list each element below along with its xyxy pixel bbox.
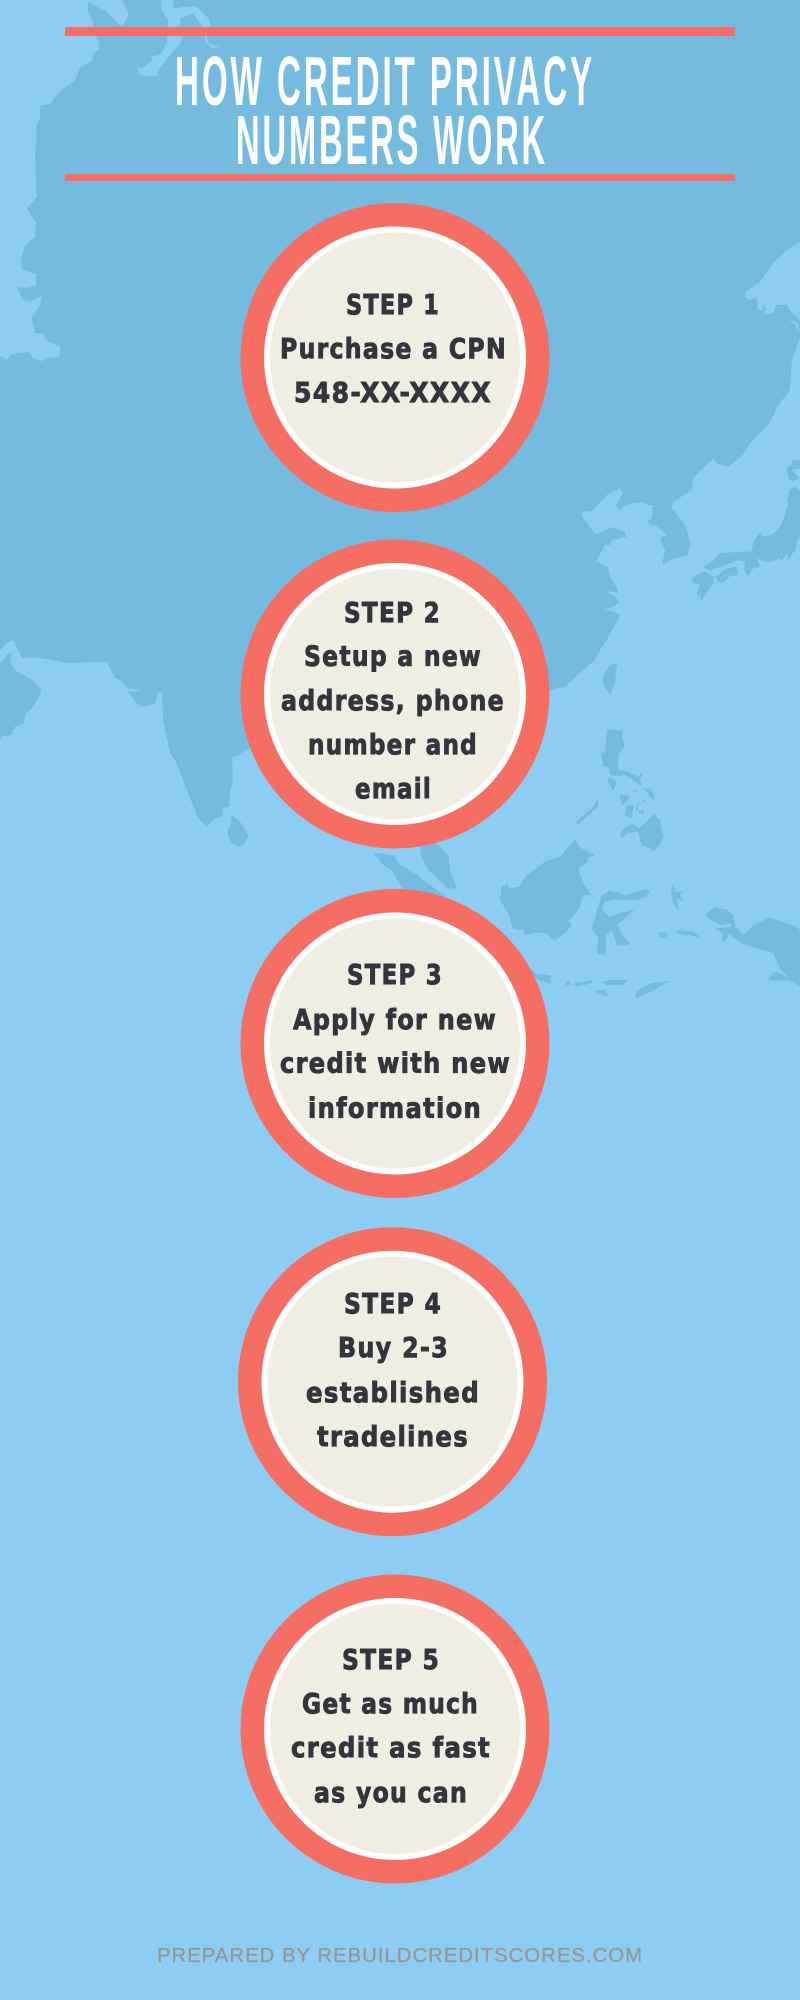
step 2 text: Setup a new	[304, 640, 482, 672]
step 1 text	[280, 289, 507, 409]
title bottom rule	[65, 174, 735, 181]
Indonesia and New Guinea	[373, 840, 800, 998]
step 5 text: credit as fast	[291, 1732, 491, 1764]
step 3 text: Apply for new	[293, 1004, 497, 1036]
step 5 text	[291, 1644, 491, 1809]
step 5 text: as you can	[314, 1777, 468, 1809]
step 4 text: Buy 2-3	[338, 1332, 449, 1364]
title top rule	[65, 27, 735, 36]
step 3 text: credit with new	[280, 1048, 511, 1080]
Caspian sea	[137, 0, 220, 77]
step 5 text: Get as much	[302, 1688, 479, 1720]
step 4 text	[306, 1288, 480, 1453]
step 1 text: Purchase a CPN	[280, 333, 507, 365]
Japan and Korea islands	[692, 460, 800, 601]
step 2 text: number and	[308, 729, 478, 761]
step 4 text: tradelines	[317, 1421, 469, 1453]
step 1 text: STEP 1	[346, 289, 440, 321]
step 1 circle	[240, 203, 550, 512]
Arabian peninsula	[0, 652, 42, 742]
mainland Asia	[0, 0, 800, 827]
step 3 text: information	[308, 1092, 482, 1124]
step 4 circle	[238, 1227, 547, 1536]
step 2 text	[281, 597, 505, 805]
Taiwan and Philippines	[577, 663, 663, 852]
footer credit: PREPARED BY REBUILDCREDITSCORES.COM	[157, 1945, 643, 1967]
map of Asia	[0, 0, 800, 998]
inland seas	[88, 0, 799, 333]
step 2 text: address, phone	[281, 685, 505, 717]
sliver in far east	[788, 319, 799, 333]
gulf wedge	[88, 0, 129, 27]
step 5 text: STEP 5	[342, 1644, 440, 1676]
step 2 circle	[240, 540, 550, 848]
step 2 text: STEP 2	[344, 597, 441, 629]
step 3 circle	[240, 889, 550, 1198]
step 5 circle	[240, 1574, 550, 1884]
step 4 text: STEP 4	[344, 1288, 442, 1320]
step 1 text: 548-XX-XXXX	[294, 377, 492, 409]
title	[65, 27, 735, 181]
step 2 text: email	[355, 773, 432, 805]
step 4 text: established	[306, 1377, 480, 1409]
step 3 text: STEP 3	[347, 959, 443, 991]
Sri Lanka	[228, 815, 248, 847]
step 3 text	[280, 959, 511, 1124]
